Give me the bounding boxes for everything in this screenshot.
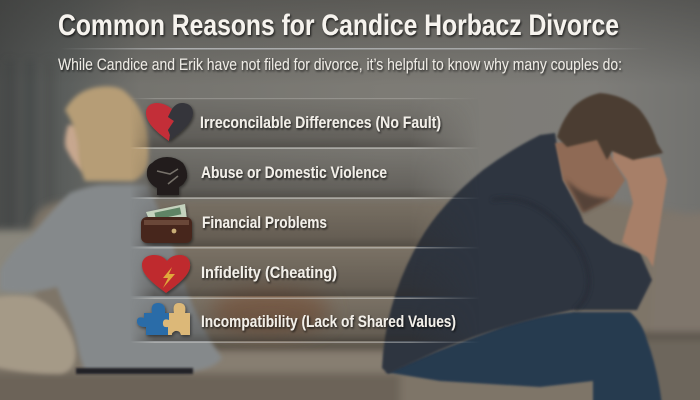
jeans xyxy=(385,312,662,400)
pants xyxy=(76,368,193,374)
beard xyxy=(565,178,612,213)
sleeve crease xyxy=(492,199,589,310)
label: Financial Problems xyxy=(202,214,327,232)
sweater xyxy=(0,185,222,371)
row 5: incompatibility xyxy=(137,303,456,335)
woman xyxy=(0,86,222,374)
row bands xyxy=(130,98,480,343)
row 3: financial xyxy=(141,204,327,243)
face xyxy=(65,125,84,172)
list of reasons xyxy=(130,98,480,343)
row 2: abuse xyxy=(147,157,387,195)
label: Incompatibility (Lack of Shared Values) xyxy=(201,313,456,331)
icon: puzzle pieces xyxy=(137,303,190,335)
hair xyxy=(557,93,663,160)
icon: clenched fist xyxy=(147,157,187,195)
icon: heart with lightning bolt xyxy=(142,255,190,293)
blurred hands on sofa xyxy=(210,288,330,336)
sofa xyxy=(0,200,700,400)
label: Infidelity (Cheating) xyxy=(201,264,337,282)
title divider xyxy=(60,48,650,50)
curtain xyxy=(6,60,53,230)
torso xyxy=(382,133,652,374)
icon: broken heart xyxy=(146,103,193,141)
pillow xyxy=(0,296,76,374)
label: Irreconcilable Differences (No Fault) xyxy=(200,114,441,132)
label: Abuse or Domestic Violence xyxy=(201,164,387,182)
row 1: irreconcilable differences xyxy=(146,103,441,141)
hair xyxy=(65,86,148,181)
icon: wallet with cash xyxy=(141,204,192,243)
row 4: infidelity xyxy=(142,255,337,293)
forearm and hand xyxy=(613,150,667,267)
man xyxy=(382,93,667,400)
face xyxy=(555,138,625,212)
